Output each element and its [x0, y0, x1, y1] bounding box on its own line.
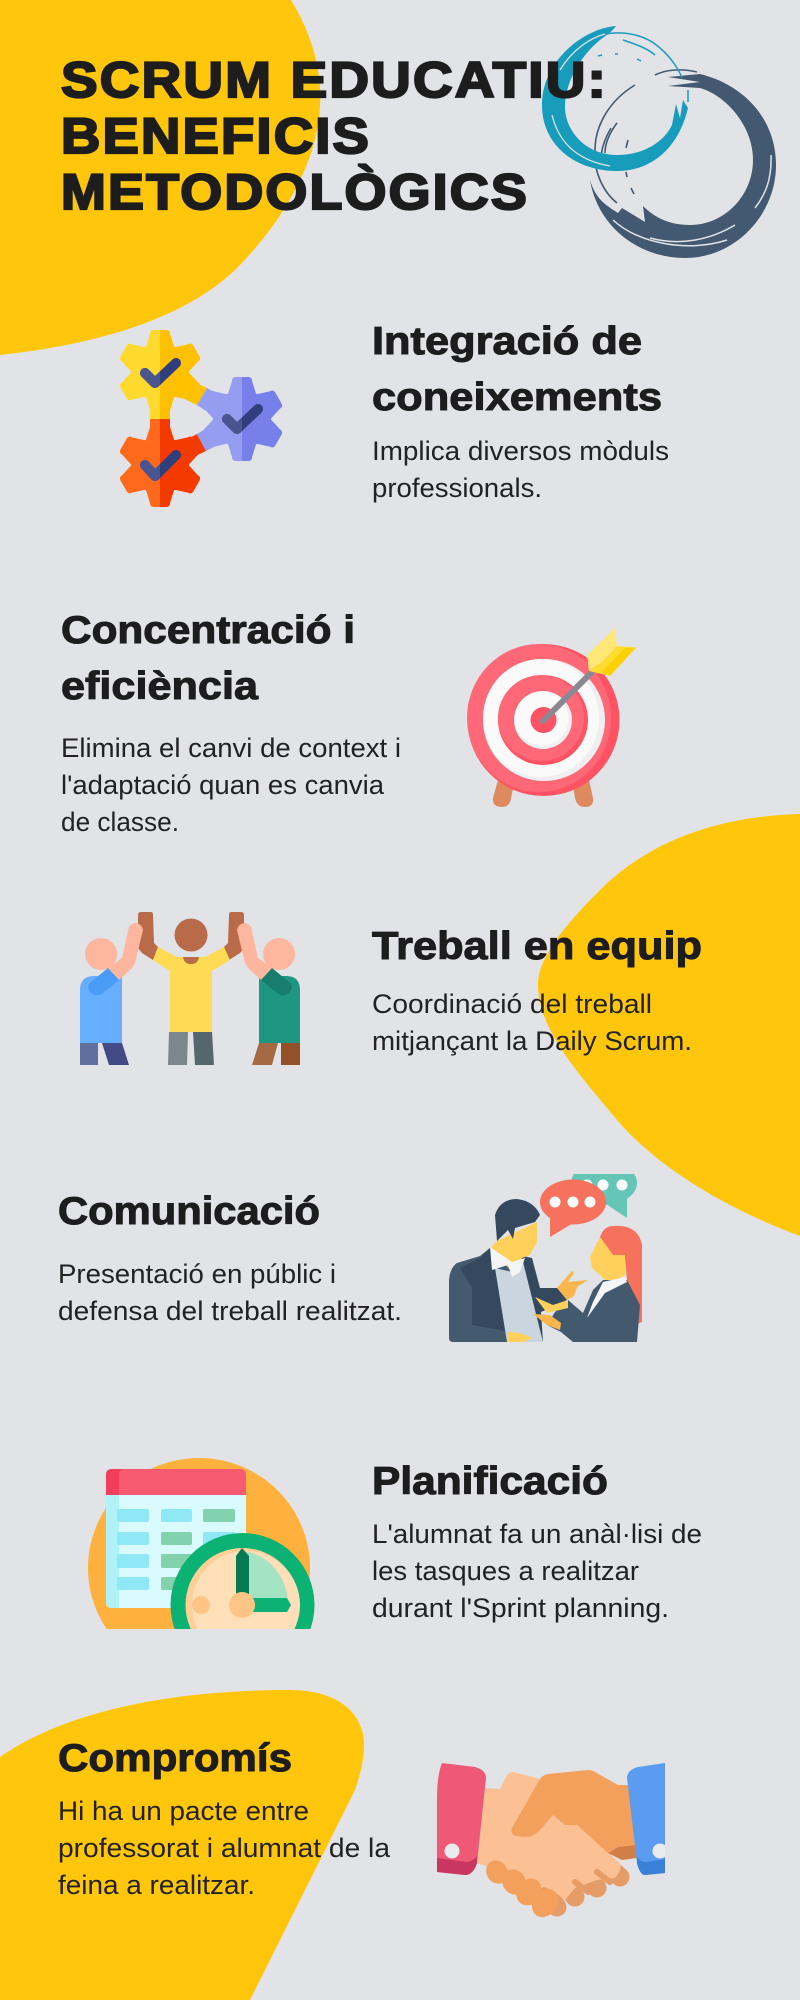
text block: durant l'Sprint planning.	[372, 1593, 669, 1623]
heading: Integració de	[372, 320, 642, 363]
icon: calendar and clock	[88, 1458, 314, 1629]
panel: comunicació	[58, 1161, 642, 1342]
heading: Treball en equip	[372, 925, 702, 968]
text block: les tasques a realitzar	[372, 1556, 639, 1586]
text block: Implica diversos mòduls	[372, 436, 669, 466]
text block: l'adaptació quan es canvia	[61, 770, 385, 800]
panel: concentració i eficiència	[61, 609, 636, 837]
text block	[58, 1259, 402, 1326]
panel: planificació	[88, 1458, 701, 1629]
icon: brush circles	[542, 26, 776, 258]
panel: compromís	[58, 1737, 668, 1922]
heading: Planificació	[372, 1460, 608, 1503]
heading: Compromís	[58, 1737, 292, 1780]
text block: professionals.	[372, 473, 542, 503]
heading: Comunicació	[58, 1190, 320, 1233]
text block	[61, 733, 401, 837]
text block: Hi ha un pacte entre	[58, 1796, 309, 1826]
text block: Coordinació del treball	[372, 989, 652, 1019]
icon: two people talking	[449, 1161, 642, 1342]
text block	[58, 1796, 391, 1900]
text block: mitjançant la Daily Scrum.	[372, 1026, 692, 1056]
text block	[372, 1519, 702, 1623]
text block: Presentació en públic i	[58, 1259, 336, 1289]
title: METODOLÒGICS	[61, 164, 529, 220]
panel: integració de coneixements	[116, 320, 669, 507]
heading: eficiència	[61, 665, 258, 708]
panel: treball en equip	[80, 912, 702, 1065]
title: SCRUM EDUCATIU:	[61, 52, 608, 108]
text block: Elimina el canvi de context i	[61, 733, 401, 763]
text block	[372, 989, 692, 1056]
text block: defensa del treball realitzat.	[58, 1296, 402, 1326]
text block	[372, 436, 669, 503]
yellow blob: middle right	[538, 814, 800, 1236]
heading: Concentració i	[61, 609, 355, 652]
heading	[372, 320, 662, 419]
heading: coneixements	[372, 376, 662, 419]
title: BENEFICIS	[61, 108, 371, 164]
text block: L'alumnat fa un anàl·lisi de	[372, 1519, 702, 1549]
icon: gears with checks	[116, 330, 286, 507]
heading	[61, 609, 355, 708]
text block: professorat i alumnat de la	[58, 1833, 391, 1863]
icon: handshake	[437, 1763, 668, 1922]
yellow blob: bottom left	[0, 1690, 364, 2000]
text block: feina a realitzar.	[58, 1870, 255, 1900]
icon: target with arrow	[467, 628, 636, 807]
icon: team high five	[80, 912, 300, 1065]
yellow blob: top left	[0, 0, 320, 355]
text block: de classe.	[61, 807, 179, 837]
title	[61, 52, 608, 220]
